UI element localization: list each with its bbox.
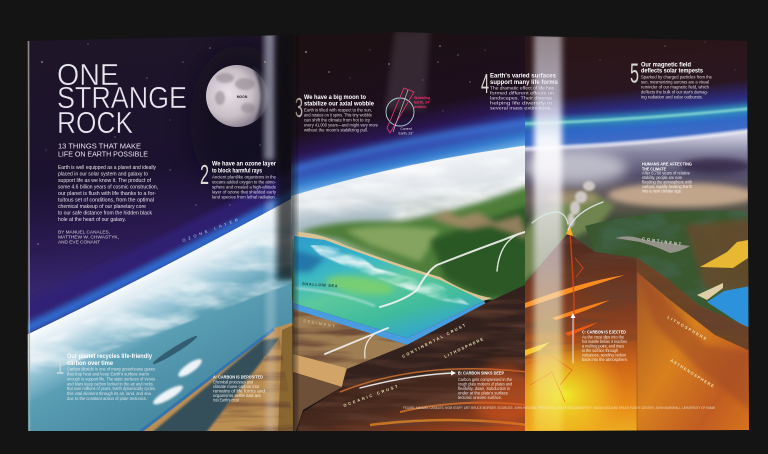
sand seabed [293,309,407,385]
item 1 heading: Our planet recycles life-friendly [67,353,152,360]
continental crust slab [320,284,527,402]
item 3 body [304,108,378,132]
callout A: carbon is deposited: into Earth's crust [213,398,240,402]
arrow head B [451,370,456,376]
byline: BY MANUEL CANALES, [58,230,110,234]
ocean inlet [707,286,750,330]
lithosphere wedge [637,274,750,410]
blue-grey haze left of land [285,205,400,240]
numeral 1: 1 [56,350,64,380]
item 4: surfaces, left portion: support many life forms [490,79,558,86]
left tan foothills [546,191,598,205]
green land mass [298,185,530,300]
intro text block: our planet is flush with life thanks to a for- [58,191,156,197]
intro text block: chemical makeup of our planetary core [58,204,146,210]
dark cloud shadow [153,336,197,364]
left green and beige land [520,192,615,285]
callout B: carbon sinks deep: flexibility, down. Subduction is [458,386,510,391]
item 4 body: The dramatic effect of life has [490,86,555,90]
callout B: carbon sinks deep: Carbon gets compressed in the [458,377,513,382]
crust labels [302,281,485,408]
intro text block: placed in our solar system and galaxy to [58,172,148,178]
intro text block: support life as we know it. The product of [58,178,152,184]
item 2 body: land species from lethal radiation. [212,194,276,200]
item 2: ozone layer: to block harmful rays [212,168,262,174]
magma network lower left [525,355,572,402]
item 1 body: due to the constant action of plate tectonics. [67,396,147,401]
item 4 body continued: helping life diversify in [490,100,553,106]
earth circle [386,98,414,126]
item 1 body: that trap heat and keep Earth's surface warm [67,372,149,376]
callout: humans affecting the climate: After 8,700 years of relative [642,170,691,176]
callout A: carbon is deposited: climate move carbon into [213,384,260,389]
item 4 body continued: The dramatic effect of life has [490,86,555,90]
item 4 body: landscapes. Their diverse [490,96,553,100]
item 5 body: ing radiation and solar outbursts. [641,94,703,100]
callout: humans affecting the climate: carbon, rapidly heating Earth [642,184,693,189]
intro text block: some 4.6 billion years of cosmic construction, [58,184,158,190]
current label: Current [400,127,412,131]
blue atmosphere band [285,122,530,172]
right page layer labels: LITHOSPHERE [666,315,709,342]
volcano rock texture [520,233,637,360]
green land right [585,211,755,330]
item 4 body: helping life diversify in [490,100,553,106]
item 1 body [67,366,156,401]
pale sandbar stripe [295,288,375,306]
callout B: carbon sinks deep [458,370,513,400]
item 3 body: every 41,000 years—and might vary more [304,122,378,128]
land texture [216,340,293,431]
smoke plume [568,181,595,227]
right page stars [600,42,735,70]
crust slab right [637,258,750,351]
pale meadow on land [345,226,440,262]
callout B: carbon sinks deep: B: CARBON SINKS DEEP [458,370,504,376]
surf foam [310,245,470,305]
item 3: moon wobble [295,92,378,132]
middle page sky [285,30,530,205]
golden cliff at page fold [278,325,293,431]
callout: humans affecting the climate: stability, people are now [642,175,682,180]
callout C: carbon is ejected: volcanoes, sending carbon [582,352,627,358]
item 3 body: can shift the climate from hot to icy [304,118,371,122]
callout A: carbon is deposited: Chemical processes and [213,380,254,384]
fold glare [264,30,275,160]
item 4 body continued: landscapes. Their diverse [490,96,553,100]
right page layer labels [642,236,716,389]
item 2: ozone layer [200,159,277,200]
right mantle face [637,258,750,435]
left page night sky [20,30,300,350]
item 1: carbon cycle [56,350,156,401]
intro text block: to our safe distance from the hidden black [58,210,152,216]
beach right [697,283,723,300]
title: ROCK [57,105,133,140]
panel: left page, title and atmosphere [20,30,300,440]
byline: AND EVE CONANT [58,240,100,244]
numeral 3: 3 [295,92,303,123]
item 2 body: Ancient plantlike organisms in the [212,174,276,180]
arrows: carbon rising through volcano [532,202,603,363]
item 4 body continued: several mass extinctions. [490,106,552,110]
intro text block: Earth is well equipped as a planet and ideally [58,165,156,171]
item 4 body continued: formed different effects on [490,90,555,96]
tilt label: wobble [413,105,426,109]
item 2 heading: We have an ozone layer [212,160,276,168]
tilt axis [393,90,408,132]
intro text block: tuitous set of conditions, from the optimal [58,198,154,204]
numeral 4: 4 [481,68,489,99]
item 4 body: several mass extinctions. [490,106,552,110]
item 4 body: formed different effects on [490,90,555,96]
seabed texture [293,309,407,385]
item 5: magnetic field: deflects solar tempests [641,68,703,74]
item 3 body: and rotates on it spins. This tiny wobble [304,112,372,118]
icon: moon [206,65,271,127]
item 1 body: But over millions of years, Earth dynamically cycles [67,386,156,391]
item 2 body: oceans added oxygen to the atmo- [212,180,276,184]
subtitle: 13 THINGS THAT MAKE [58,142,141,150]
item 3 heading: We have a big moon to [304,94,366,101]
grey lake [615,236,690,253]
item 4: surfaces, left portion [481,68,558,110]
byline: MATTHEW W. CHWASTYK, [58,234,119,240]
dark vignette behind moon [192,52,276,200]
chart: earth tilt diagram [386,88,431,136]
middle page earth and cloud bank [285,145,530,300]
callout A: carbon is deposited: A: CARBON IS DEPOSITED [213,374,263,380]
deep water corner [293,250,325,272]
item 1 body: enough to support life. The static surfaces of Venus [67,376,156,382]
golden city terrain [700,240,748,268]
left page earth surface [28,199,293,431]
right page sky [520,30,755,160]
arrow head C [570,313,576,318]
oceanic crust and mantle [296,372,527,433]
callout B: carbon sinks deep: tectonic uneven surface. [458,395,502,400]
title: ONE [57,57,119,92]
ocean block front edge [293,301,486,345]
callout: humans affecting the climate: HUMANS ARE AFFECTING [642,162,693,166]
light streak in page fold [534,33,562,433]
fold glare lower [266,200,275,435]
item 4: surfaces, right portion under glare: support many life forms [490,79,558,86]
callout A: carbon is deposited [213,374,266,402]
item 3 body: Earth is tilted with respect to the sun, [304,108,372,112]
item 3 body: without the moon's stabilizing pull. [304,128,368,132]
item 1 body: Carbon dioxide is one of many greenhouse gases [67,366,156,372]
right page layer labels: ASTHENOSPHERE [669,358,716,389]
item 2 body: sphere and created a high-altitude [212,184,276,190]
cliff face [293,354,346,387]
item 4 heading continued: Earth's varied surfaces [490,72,556,80]
crust labels: OCEANIC CRUST [343,383,400,408]
panel: middle page, coast and crust [291,32,525,431]
tilt wedge [387,88,414,133]
left page stars [37,44,266,245]
lava sills [525,275,625,356]
fold line [636,258,638,431]
ozone layer label: OZONE LAYER [182,216,241,243]
callout: humans affecting the climate [642,162,693,194]
callout C: carbon is ejected: to the surface through [582,348,619,353]
byline [58,230,119,244]
item 2 body [212,174,277,200]
numeral 5: 5 [630,58,639,88]
crust labels: LITHOSPHERE [443,336,485,359]
dark coastal vegetation [150,338,280,434]
crust labels: CONTINENTAL CRUST [401,322,468,359]
forest texture [430,205,530,300]
moon maria [215,73,255,113]
magma conduit [570,232,574,345]
current label: Earth, 23° [398,132,414,136]
crust slab texture [637,258,750,351]
callout: humans affecting the climate: flooding the atmosphere with [642,180,693,184]
volcano vent glow [566,226,573,236]
callout C: carbon is ejected: hot mantle below, it reaches [582,339,627,344]
coastal land mass [142,322,293,431]
subtitle [58,144,148,156]
bright limb cloud [520,130,755,149]
callout: humans affecting the climate: THE CLIMATE [642,166,666,172]
item 4 heading: Earth's varied surfaces [490,72,556,80]
right page layer labels: CONTINENT [642,236,683,247]
green lagoon [325,272,395,298]
item 5 body: sun, mesmerizing auroras are a visual [641,80,709,84]
item 1 body: and Mars keep carbon locked in the air and rocks. [67,382,154,386]
tan cloud deck [608,183,756,207]
left clouds [523,151,627,185]
moon shadow [252,68,268,122]
blue shoreline [140,329,274,432]
middle page stars [305,45,485,111]
title: STRANGE [57,80,187,115]
item 5 body: reminder of our magnetic field, which [641,84,709,90]
tilt label: Earth, 24° [414,100,431,104]
magma branch [575,258,583,277]
left page cloud cover [28,232,292,373]
intro text block [58,165,158,223]
item 3: moon wobble: stabilize our axial wobble [304,100,374,108]
rock strata texture [296,284,527,433]
callout B: carbon sinks deep: rough plate motions of plates and [458,382,513,386]
tilt label: Wobbling [414,96,430,100]
item 2 body: layer of ozone that shielded early [212,190,277,194]
white cloud patches [151,356,204,407]
item 4 body continued [490,86,555,110]
beach [297,232,492,301]
item 5 body: deflects the bulk of our star's damag- [641,90,708,94]
arrows: carbon path across land and sea [325,232,525,388]
item 5 heading: Our magnetic field [641,62,691,68]
crust labels: SEDIMENT [303,318,337,329]
callout C: carbon is ejected: back into the atmosphere. [582,357,628,362]
callout C: carbon is ejected: As the crust dips into the [582,334,625,340]
callout C: carbon is ejected: C: CARBON IS EJECTED [582,330,626,334]
light rays in sky [385,30,430,110]
item 1 body: this vital element through its air, land, and sea [67,391,151,396]
callout C: carbon is ejected [582,330,628,362]
crust labels: SHALLOW SEA [302,281,338,289]
volcano and mantle left face [520,233,637,435]
item 5: magnetic field [630,58,712,100]
purple and blue atmospheric glow [20,184,300,332]
item 5 body: Sparked by charged particles from the [641,74,712,80]
ocean block top [293,236,484,338]
item 1: carbon cycle: carbon over time [67,360,113,367]
aurora line [520,108,755,124]
lower right orange glow [473,363,537,427]
yellow heat glow [506,340,626,450]
fold shadow [277,30,295,280]
panel: right page, aurora and volcano [490,30,756,450]
page edge [28,41,30,431]
credit line: FIGURE: MANUEL CANALES, NGM STAFF; ART: BRUCE MORSER. SOURCES: JOHN HIGGINS, PRINCETON; STANFORD UNIVERSITY; NASA GODDARD SPACE FLIGHT CENTER; JOHN MARSHALL, UNIVERSITY OF MIAMI [403,406,715,410]
fold shadow between left and middle page [286,30,296,440]
callout A: carbon is deposited: remains of life forms and [213,388,266,394]
current label [398,127,414,136]
item 5 body [641,74,712,100]
moon label: MOON [237,95,248,99]
intro text block: hole at the heart of our galaxy. [58,217,126,223]
tilt label [413,96,431,109]
item 4 body [490,86,555,110]
callout: humans affecting the climate: into a new climate age. [642,188,682,194]
numeral 2: 2 [200,159,209,190]
callout C: carbon is ejected: a melting point, and rises [582,344,624,348]
forest texture right [585,211,755,330]
dark purple mountains [679,158,751,174]
glowing strata lines [340,369,527,425]
brown terrain right [685,218,755,295]
aurora glow [520,108,755,124]
subtitle: LIFE ON EARTH POSSIBLE [58,150,148,158]
right page earth haze and land [520,130,755,290]
callout A: carbon is deposited: organisms settle and are [213,393,262,398]
title [58,64,186,134]
middle cloud texture [285,145,530,240]
item 4: surfaces, right portion under glare [490,72,558,110]
callout B: carbon sinks deep: under at the plate's surface [458,390,509,396]
lower rock [293,372,342,431]
tan ridge hills [430,211,528,240]
